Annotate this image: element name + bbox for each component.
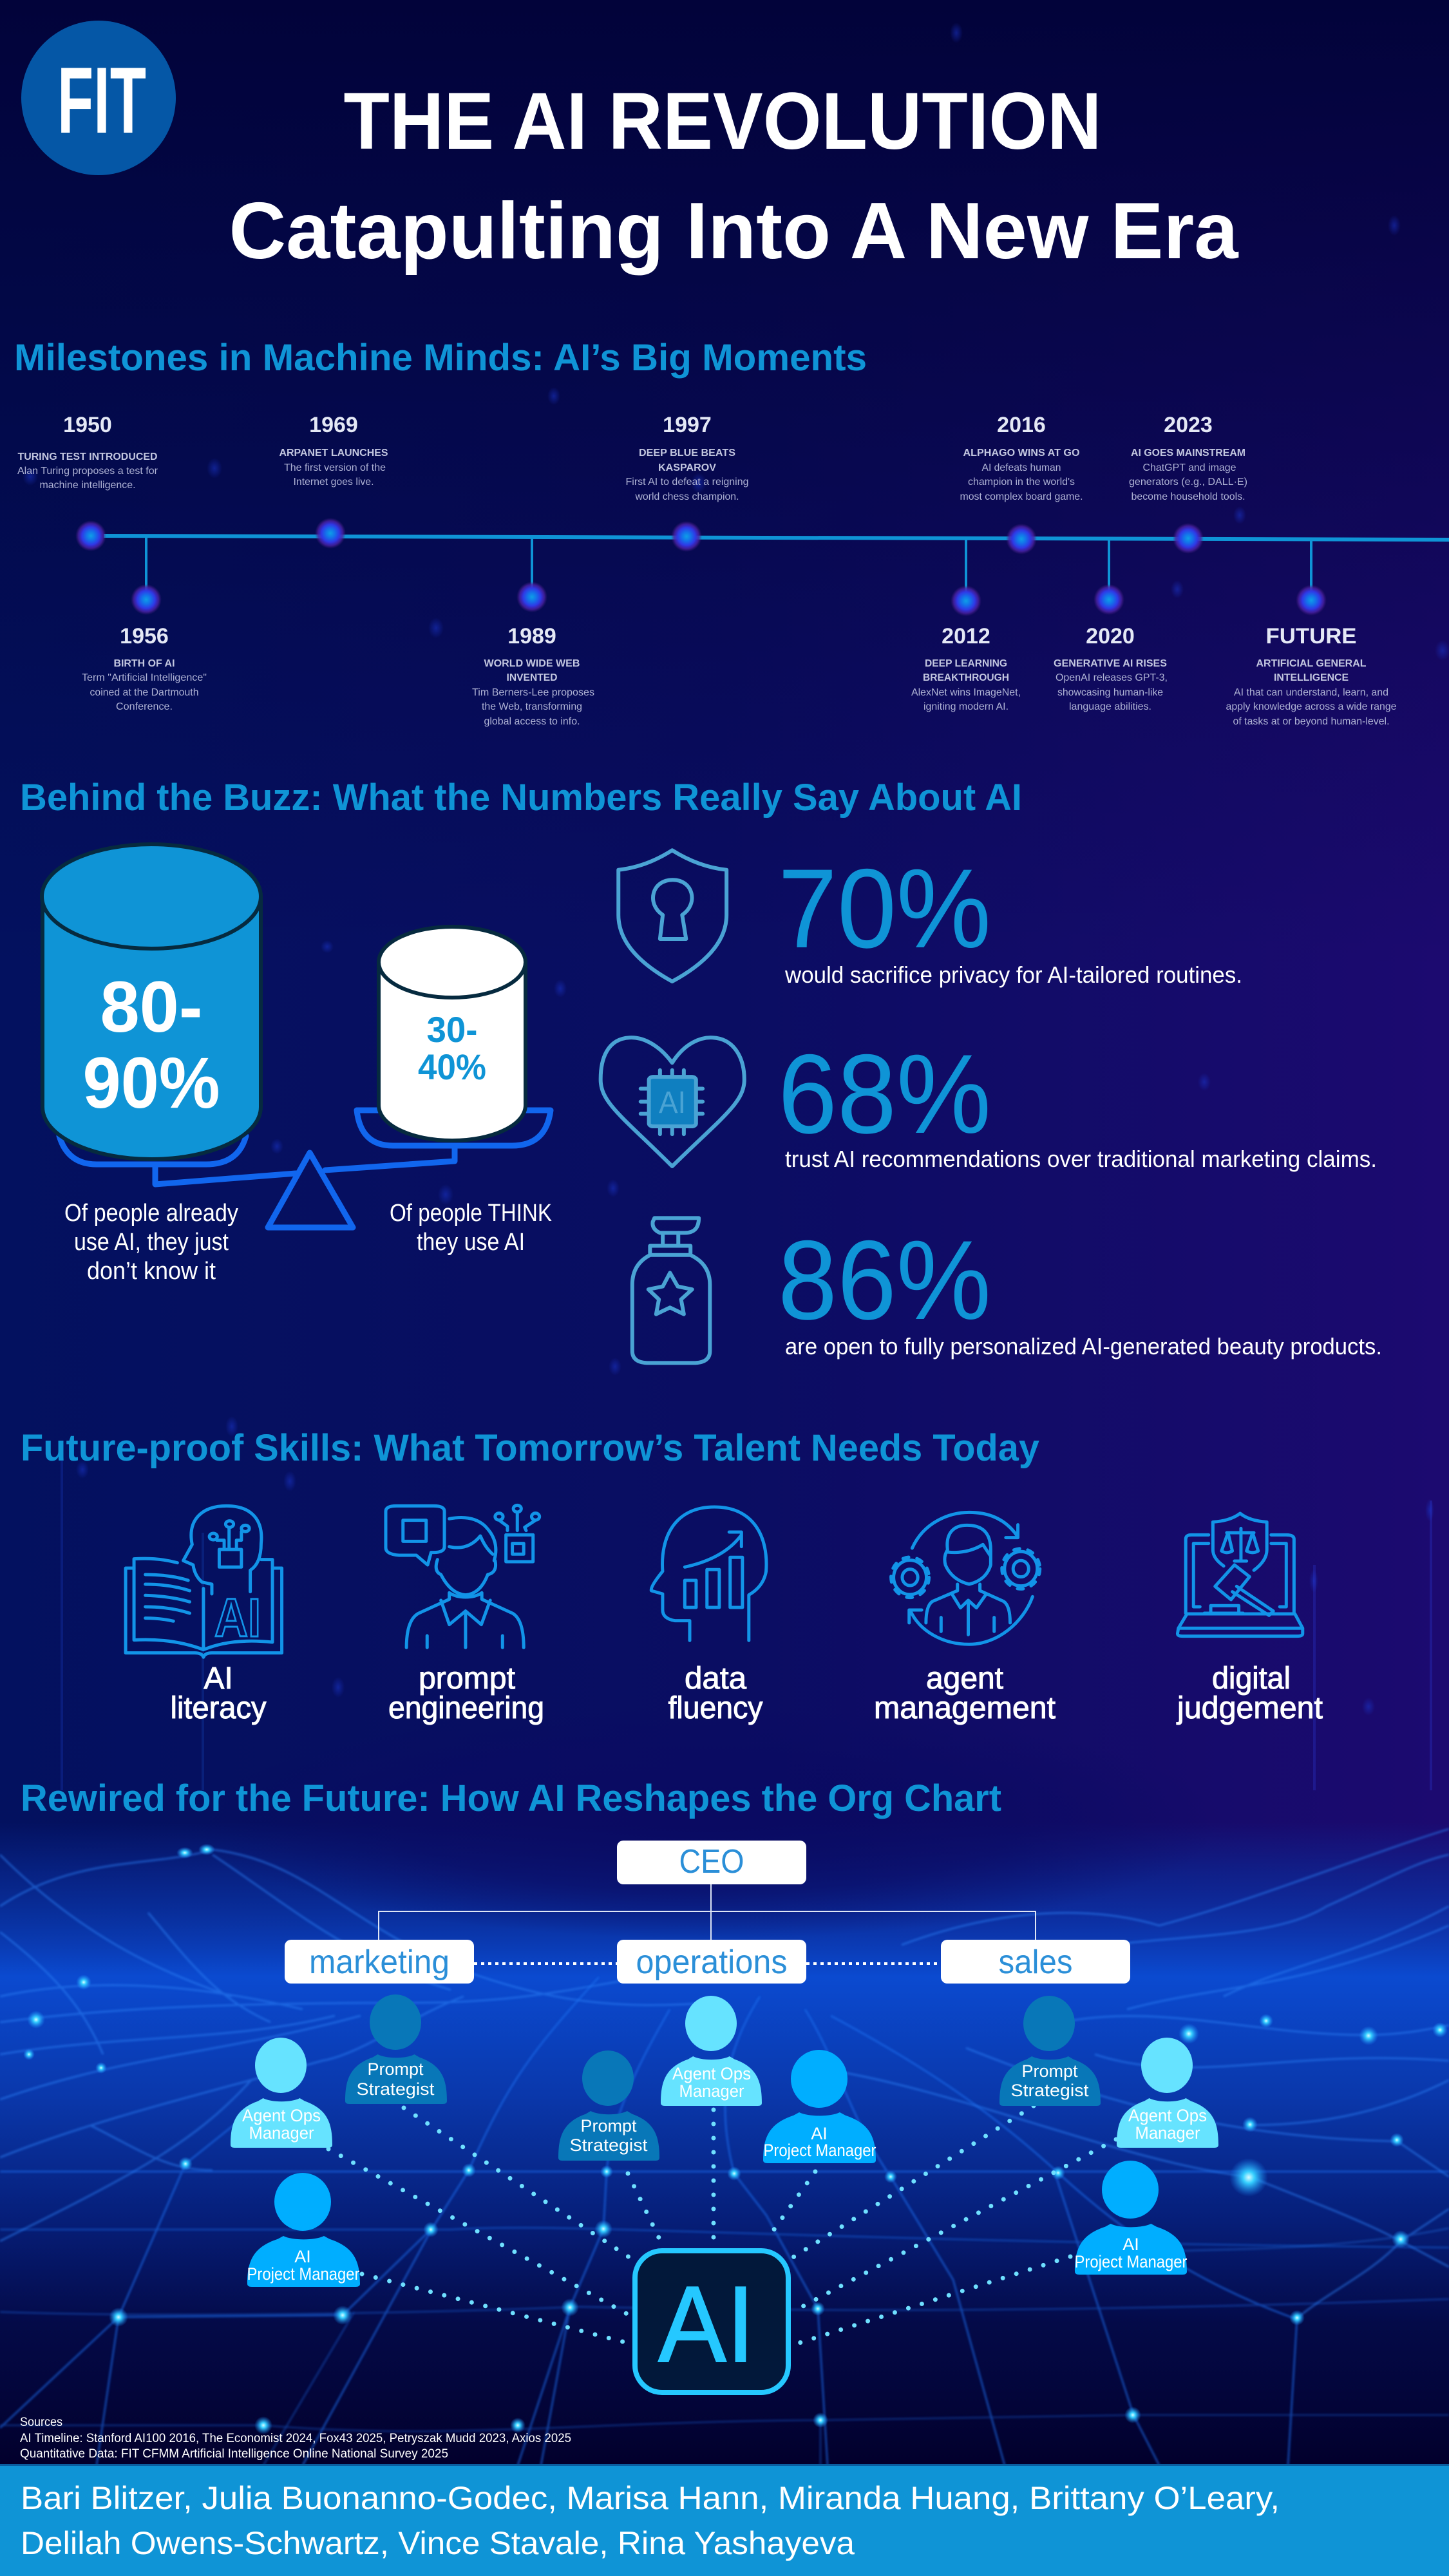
person: marketing agent ops manager: Manager xyxy=(249,2123,314,2143)
skill: agent management: agent xyxy=(926,1662,1003,1696)
milestone 2016: 2016 xyxy=(997,413,1046,437)
milestone 1969: Internet goes live. xyxy=(294,477,374,488)
person: sales agent ops manager: Agent Ops xyxy=(1128,2106,1207,2125)
milestone 1997: DEEP BLUE BEATS xyxy=(639,448,735,459)
skill: data fluency xyxy=(651,1507,766,1725)
logo: FIT xyxy=(21,21,176,175)
milestone future: FUTURE xyxy=(1266,624,1356,649)
icon: heart with AI chip xyxy=(601,1037,744,1166)
caption left xyxy=(64,1200,238,1285)
timeline nodes xyxy=(75,518,1327,616)
timeline xyxy=(17,413,1449,727)
milestone 2020: language abilities. xyxy=(1069,701,1151,712)
milestone 1950: machine intelligence. xyxy=(40,480,135,491)
person: sales prompt strategist: Strategist xyxy=(1011,2081,1089,2100)
skill: digital judgement xyxy=(1176,1513,1323,1725)
milestone 1997: 1997 xyxy=(663,413,712,437)
person: operations AI project manager xyxy=(763,2050,876,2163)
caption left: don’t know it xyxy=(87,1258,216,1285)
icon: head with bar chart xyxy=(651,1507,766,1640)
skill: agent management: management xyxy=(874,1691,1056,1725)
milestone 2012 xyxy=(911,624,1021,712)
person: sales AI project manager: AI xyxy=(1122,2235,1139,2254)
small cylinder: 40% xyxy=(418,1046,486,1087)
milestone 1956: 1956 xyxy=(120,624,169,649)
milestone 2023: become household tools. xyxy=(1131,491,1245,502)
milestone 2012: 2012 xyxy=(942,624,990,649)
AI hub xyxy=(635,2251,788,2392)
person: operations agent ops manager: Manager xyxy=(679,2081,744,2101)
milestone 2020 xyxy=(1054,624,1168,712)
heading: future-proof skills: Future-proof Skills: What Tomorrow’s Talent Needs Today xyxy=(21,1427,1039,1469)
caption left: Of people already xyxy=(64,1200,238,1227)
person: operations prompt strategist xyxy=(558,2050,659,2161)
person: marketing AI project manager xyxy=(247,2173,360,2287)
footer credits: Bari Blitzer, Julia Buonanno-Godec, Marisa Hann, Miranda Huang, Brittany O’Leary, xyxy=(21,2480,1280,2516)
milestone 1950: Alan Turing proposes a test for xyxy=(17,466,158,477)
caption left: use AI, they just xyxy=(74,1229,229,1256)
box: marketing xyxy=(285,1940,474,1984)
milestone 2016: most complex board game. xyxy=(960,491,1083,502)
caption right: they use AI xyxy=(417,1229,525,1256)
stat: 68% xyxy=(601,1032,1377,1172)
timeline axis xyxy=(104,536,1449,599)
large cylinder xyxy=(42,844,261,1159)
icon: person with speech bubble and chip xyxy=(386,1505,540,1647)
milestone 2016: champion in the world's xyxy=(968,477,1075,488)
caption right: Of people THINK xyxy=(390,1200,552,1227)
skill: data fluency: data xyxy=(685,1662,746,1696)
milestone 1989 xyxy=(472,624,594,727)
icon: shield with keyhole xyxy=(618,850,726,981)
person: sales agent ops manager: Manager xyxy=(1135,2123,1200,2143)
person: operations agent ops manager xyxy=(661,1996,762,2106)
milestone 2012: igniting modern AI. xyxy=(923,701,1009,712)
milestone 1950: TURING TEST INTRODUCED xyxy=(18,451,157,462)
stat: 70% xyxy=(618,846,1242,988)
milestone 2020: OpenAI releases GPT-3, xyxy=(1056,672,1168,683)
AI hub: AI xyxy=(658,2264,755,2385)
milestone 1969: 1969 xyxy=(309,413,358,437)
person: operations AI project manager: AI xyxy=(811,2124,828,2143)
milestone 1956: Conference. xyxy=(116,701,173,712)
scale xyxy=(59,1110,551,1227)
milestone future xyxy=(1226,624,1397,727)
person: operations agent ops manager: Agent Ops xyxy=(672,2064,751,2083)
sources: Sources xyxy=(20,2416,62,2429)
milestone 2020: showcasing human-like xyxy=(1057,687,1163,698)
heading: milestones: Milestones in Machine Minds: AI’s Big Moments xyxy=(14,337,867,379)
network background image xyxy=(0,1707,1449,2465)
sources xyxy=(20,2416,571,2461)
milestone 2012: BREAKTHROUGH xyxy=(923,672,1009,683)
skill: agent management xyxy=(874,1512,1056,1725)
person: marketing prompt strategist: Prompt xyxy=(367,2060,424,2079)
milestone 1989: INVENTED xyxy=(506,672,558,683)
skill: AI literacy: AI xyxy=(204,1662,233,1696)
milestone 1956: Term "Artificial Intelligence" xyxy=(82,672,207,683)
person: operations AI project manager: Project Manager xyxy=(764,2141,876,2160)
sources: Quantitative Data: FIT CFMM Artificial Intelligence Online National Survey 2025 xyxy=(20,2447,448,2461)
milestone 1997 xyxy=(626,413,748,502)
person: marketing agent ops manager: Agent Ops xyxy=(242,2106,321,2125)
person: operations prompt strategist: Prompt xyxy=(581,2116,637,2136)
milestone 2016: ALPHAGO WINS AT GO xyxy=(963,448,1079,459)
milestone 2023: AI GOES MAINSTREAM xyxy=(1131,448,1245,459)
org chart connectors xyxy=(379,1884,1036,1964)
milestone 1989: the Web, transforming xyxy=(482,701,582,712)
box: CEO xyxy=(617,1841,806,1884)
milestone 2023 xyxy=(1129,413,1247,502)
large cylinder: 80- xyxy=(100,967,202,1047)
milestone 2023: generators (e.g., DALL·E) xyxy=(1129,477,1247,488)
milestone 2023: 2023 xyxy=(1164,413,1213,437)
person: sales AI project manager: Project Manager xyxy=(1074,2252,1188,2271)
milestone 1989: 1989 xyxy=(507,624,556,649)
sources: AI Timeline: Stanford AI100 2016, The Economist 2024, Fox43 2025, Petryszak Mudd 2023, Axios 2025 xyxy=(20,2432,571,2445)
small cylinder xyxy=(379,927,526,1141)
icon: laptop with scales and gavel xyxy=(1177,1513,1303,1636)
person: sales prompt strategist: Prompt xyxy=(1021,2061,1078,2081)
milestone 2020: GENERATIVE AI RISES xyxy=(1054,658,1167,669)
icon: book and AI head: AI xyxy=(214,1587,261,1648)
title: Catapulting Into A New Era xyxy=(229,187,1239,276)
stat: 86%: 86% xyxy=(778,1218,991,1343)
box: sales xyxy=(941,1940,1130,1984)
large cylinder: 90% xyxy=(82,1043,220,1123)
icon: person with gears and cycle arrows xyxy=(891,1512,1040,1644)
stat: 68%: 68% xyxy=(778,1032,991,1157)
milestone 2016 xyxy=(960,413,1083,502)
person: sales AI project manager xyxy=(1074,2161,1188,2275)
skill: data fluency: fluency xyxy=(668,1691,762,1725)
person: sales prompt strategist xyxy=(999,1996,1101,2106)
person: sales agent ops manager xyxy=(1117,2038,1218,2148)
skill: AI literacy: literacy xyxy=(170,1691,267,1725)
milestone 1989: global access to info. xyxy=(484,716,580,727)
milestone 2012: AlexNet wins ImageNet, xyxy=(911,687,1021,698)
person: operations prompt strategist: Strategist xyxy=(569,2136,648,2155)
heading: behind the buzz: Behind the Buzz: What the Numbers Really Say About AI xyxy=(20,777,1022,819)
stat: 86% xyxy=(632,1218,1382,1363)
person: marketing prompt strategist: Strategist xyxy=(357,2079,435,2099)
box: marketing: marketing xyxy=(309,1944,450,1981)
stat: 86%: are open to fully personalized AI-generated beauty products. xyxy=(785,1333,1382,1359)
skill: AI literacy xyxy=(126,1506,282,1725)
milestone 1989: WORLD WIDE WEB xyxy=(484,658,580,669)
AI connection dots xyxy=(328,2106,1116,2344)
icon: book and AI head xyxy=(126,1506,282,1657)
milestone 1969: The first version of the xyxy=(284,462,386,473)
skill: prompt engineering: engineering xyxy=(388,1691,544,1725)
small cylinder: 30- xyxy=(426,1009,478,1050)
milestone 1950: 1950 xyxy=(63,413,112,437)
skill: digital judgement: judgement xyxy=(1176,1691,1323,1725)
person: marketing AI project manager: AI xyxy=(294,2247,311,2266)
milestone 1956: coined at the Dartmouth xyxy=(90,687,198,698)
milestone future: INTELLIGENCE xyxy=(1274,672,1349,683)
stat: 68%: trust AI recommendations over traditional marketing claims. xyxy=(785,1146,1377,1172)
skill: digital judgement: digital xyxy=(1212,1662,1291,1696)
title xyxy=(229,77,1239,276)
stat: 70%: would sacrifice privacy for AI-tailored routines. xyxy=(784,961,1242,988)
footer credits: Delilah Owens-Schwartz, Vince Stavale, Rina Yashayeva xyxy=(21,2525,855,2561)
milestone 1950 xyxy=(17,413,158,491)
person: marketing prompt strategist xyxy=(345,1994,447,2104)
title: THE AI REVOLUTION xyxy=(344,77,1101,166)
person: marketing agent ops manager xyxy=(231,2038,332,2148)
milestone 1956 xyxy=(82,624,207,712)
milestone future: of tasks at or beyond human-level. xyxy=(1233,716,1390,727)
milestone 2016: AI defeats human xyxy=(981,462,1061,473)
logo: FIT: FIT xyxy=(57,48,146,153)
milestone 2023: ChatGPT and image xyxy=(1142,462,1236,473)
milestone future: ARTIFICIAL GENERAL xyxy=(1256,658,1367,669)
box: operations: operations xyxy=(636,1944,787,1981)
balance scale comparison xyxy=(42,844,552,1285)
icon: heart with AI chip: AI xyxy=(659,1086,686,1120)
skill: prompt engineering: prompt xyxy=(419,1662,515,1696)
milestone 1956: BIRTH OF AI xyxy=(113,658,175,669)
footer credits xyxy=(0,2464,1449,2576)
milestone future: AI that can understand, learn, and xyxy=(1234,687,1388,698)
heading: rewired for the future: Rewired for the Future: How AI Reshapes the Org Chart xyxy=(21,1777,1001,1819)
caption right xyxy=(390,1200,552,1256)
milestone 1969 xyxy=(279,413,388,488)
milestone 1997: world chess champion. xyxy=(635,491,739,502)
milestone 1997: KASPAROV xyxy=(658,462,716,473)
stat: 70%: 70% xyxy=(778,846,991,972)
milestone 1969: ARPANET LAUNCHES xyxy=(279,448,388,459)
milestone 2020: 2020 xyxy=(1086,624,1135,649)
skill: prompt engineering xyxy=(386,1505,544,1725)
box: CEO: CEO xyxy=(679,1843,744,1880)
milestone 1989: Tim Berners-Lee proposes xyxy=(472,687,594,698)
milestone future: apply knowledge across a wide range xyxy=(1226,701,1397,712)
icon: pump bottle with star xyxy=(632,1218,710,1363)
box: sales: sales xyxy=(998,1944,1073,1981)
milestone 2012: DEEP LEARNING xyxy=(925,658,1007,669)
milestone 1997: First AI to defeat a reigning xyxy=(626,477,748,488)
person: marketing AI project manager: Project Manager xyxy=(247,2264,359,2284)
